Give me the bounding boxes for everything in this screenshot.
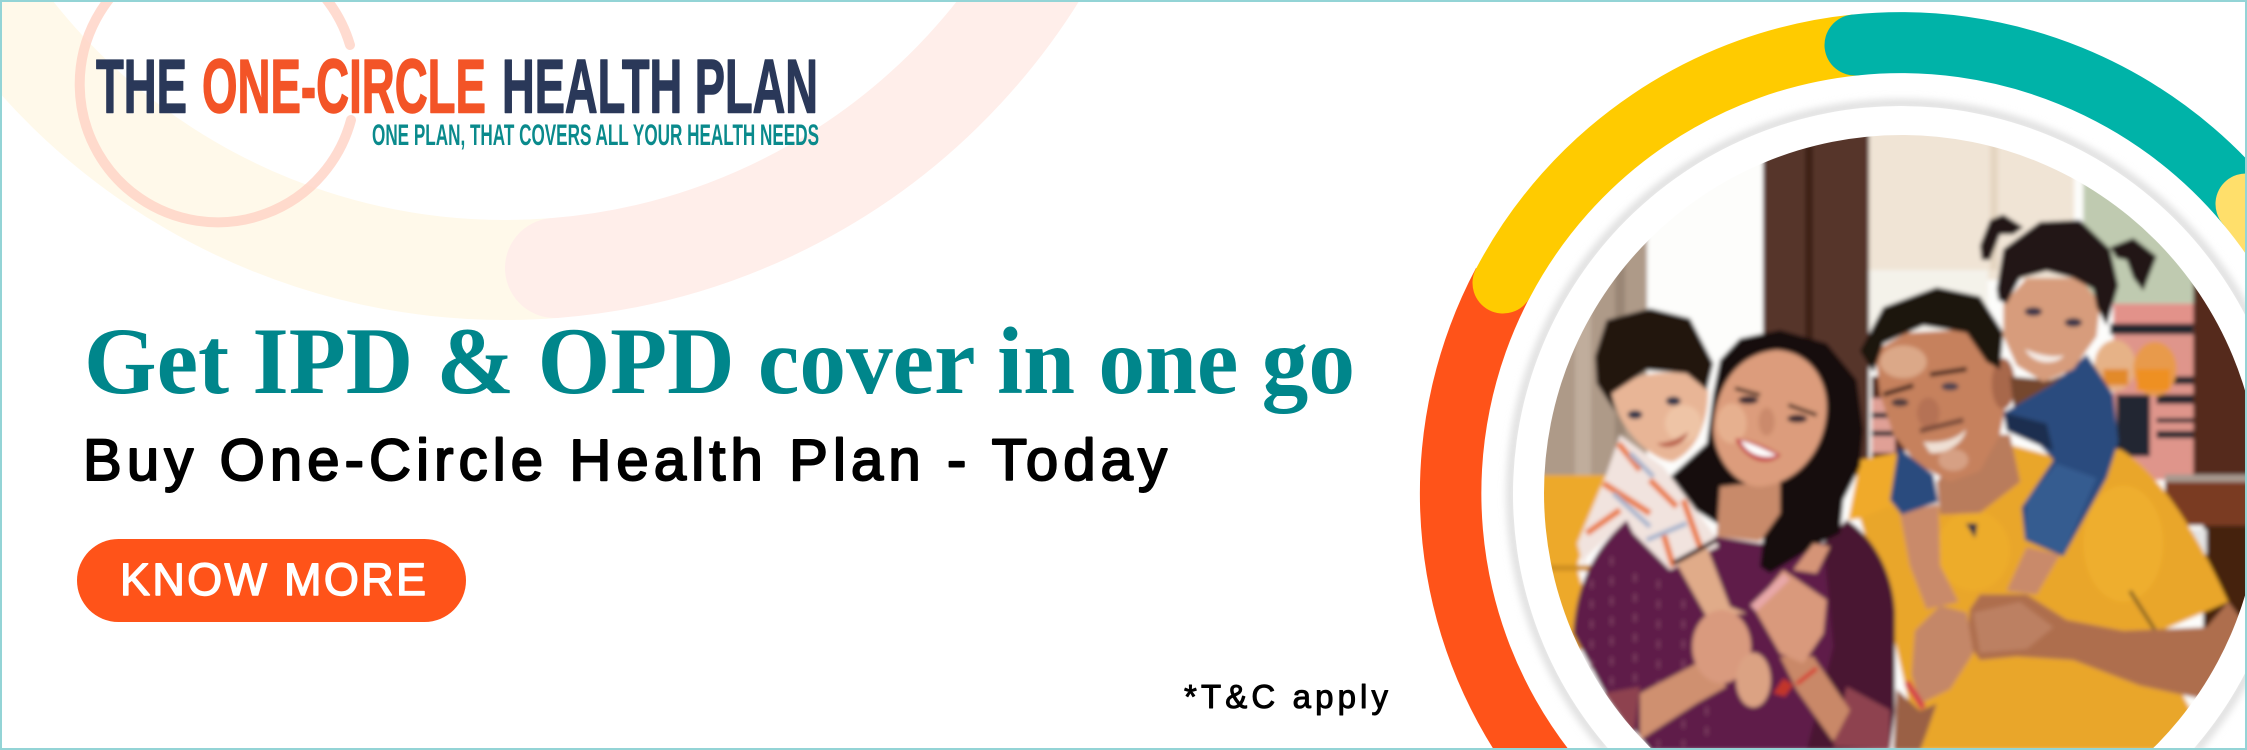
woman [1573, 330, 1895, 750]
girl body [2003, 355, 2118, 595]
ring segment: orange [1420, 268, 1569, 750]
button: know more [77, 539, 466, 622]
logo title: THE [96, 44, 187, 130]
headline: Get IPD & OPD cover in one go [84, 308, 1355, 414]
girl head [1980, 215, 2157, 382]
boy [1577, 308, 1718, 570]
logo title: ONE-CIRCLE [202, 44, 486, 130]
man [1860, 287, 2228, 750]
background arc decoration [0, 0, 1131, 270]
girl left sleeve and leg [1890, 447, 1958, 609]
coloured ring [1420, 43, 2247, 750]
family photo [1540, 130, 2247, 750]
logo title [96, 44, 818, 130]
man and girl [1860, 215, 2245, 750]
photo background [1540, 130, 2247, 750]
man arms and hands [1893, 595, 2245, 750]
small logo ring [80, 0, 351, 222]
button: know more: KNOW MORE [120, 554, 426, 605]
ring segment: teal [1855, 43, 2246, 204]
ring segment: yellow [1503, 45, 1855, 283]
logo tagline: ONE PLAN, THAT COVERS ALL YOUR HEALTH NEEDS [372, 119, 819, 152]
terms note: *T&C apply [1184, 678, 1388, 715]
white photo frame [1511, 104, 2247, 750]
logo title: HEALTH PLAN [502, 44, 818, 130]
arms and hands [1640, 540, 1850, 742]
subheading: Buy One-Circle Health Plan - Today [83, 428, 1167, 493]
right side background [1848, 169, 2247, 627]
ring segment: light yellow [2246, 204, 2247, 307]
woman and boy [1573, 308, 1895, 750]
